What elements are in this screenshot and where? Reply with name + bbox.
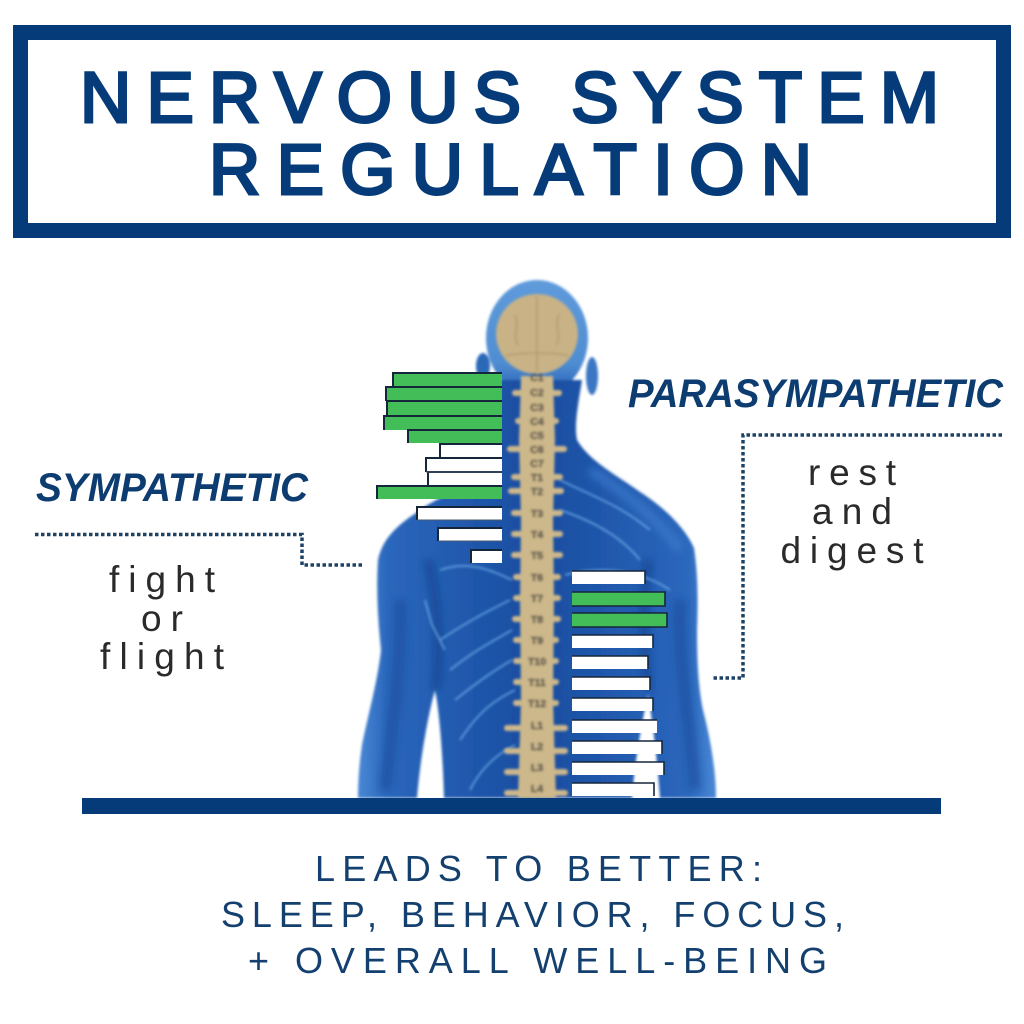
vertebra labels: T5 — [531, 550, 543, 562]
vertebra labels: T2 — [531, 486, 543, 498]
vertebra labels: C2 — [530, 387, 544, 399]
fight or flight text: or — [141, 598, 183, 639]
vertebra labels: T3 — [531, 508, 543, 520]
rest and digest text: rest — [808, 452, 897, 493]
vertebra labels: L3 — [531, 762, 543, 774]
vertebra processes — [507, 393, 565, 793]
title box — [20, 32, 1004, 230]
benefits text: + OVERALL WELL-BEING — [248, 940, 827, 981]
fight or flight text: fight — [109, 559, 216, 600]
arm and back shading — [385, 470, 695, 790]
right ear — [586, 357, 598, 395]
nerve highlights — [425, 480, 670, 790]
title line 2: REGULATION — [209, 131, 812, 210]
vertebra labels: T8 — [531, 614, 543, 626]
vertebra labels: L1 — [531, 720, 543, 732]
vertebra labels: T12 — [528, 698, 546, 710]
rest and digest text — [780, 452, 924, 571]
vertebra labels: T9 — [531, 635, 543, 647]
benefits text — [221, 848, 844, 981]
anatomy figure: back, brain and spine — [358, 280, 716, 798]
parasympathetic bars — [572, 571, 667, 796]
vertebra labels: C3 — [530, 402, 544, 414]
divider bar — [82, 798, 941, 814]
parasympathetic dotted connector — [712, 435, 1002, 678]
fight or flight text — [100, 559, 225, 677]
vertebra labels: C7 — [530, 458, 544, 470]
benefits text: SLEEP, BEHAVIOR, FOCUS, — [221, 894, 844, 935]
sympathetic heading: SYMPATHETIC — [36, 466, 309, 510]
vertebra labels: T1 — [531, 472, 543, 484]
head — [486, 280, 588, 396]
benefits text: LEADS TO BETTER: — [315, 848, 762, 889]
vertebra labels: T11 — [528, 677, 546, 689]
body silhouette — [358, 280, 716, 798]
rest and digest text: and — [812, 491, 892, 532]
left ear — [476, 353, 490, 379]
sympathetic bars — [377, 373, 502, 563]
brain — [496, 294, 578, 374]
vertebra labels: C5 — [530, 430, 544, 442]
vertebra labels: C6 — [530, 444, 544, 456]
vertebra labels: T10 — [528, 656, 546, 668]
vertebra labels: T4 — [531, 529, 543, 541]
parasympathetic heading: PARASYMPATHETIC — [628, 372, 1004, 416]
vertebra labels: L4 — [531, 783, 543, 795]
vertebra labels: T7 — [531, 593, 543, 605]
fight or flight text: flight — [100, 636, 225, 677]
title line 1: NERVOUS SYSTEM — [80, 59, 939, 138]
rest and digest text: digest — [780, 530, 924, 571]
sympathetic dotted connector — [35, 534, 364, 565]
vertebra labels: C4 — [530, 416, 544, 428]
vertebra labels — [528, 372, 546, 795]
vertebra labels: C1 — [530, 372, 544, 384]
spine — [507, 372, 565, 798]
vertebra labels: T6 — [531, 572, 543, 584]
vertebra labels: L2 — [531, 741, 543, 753]
